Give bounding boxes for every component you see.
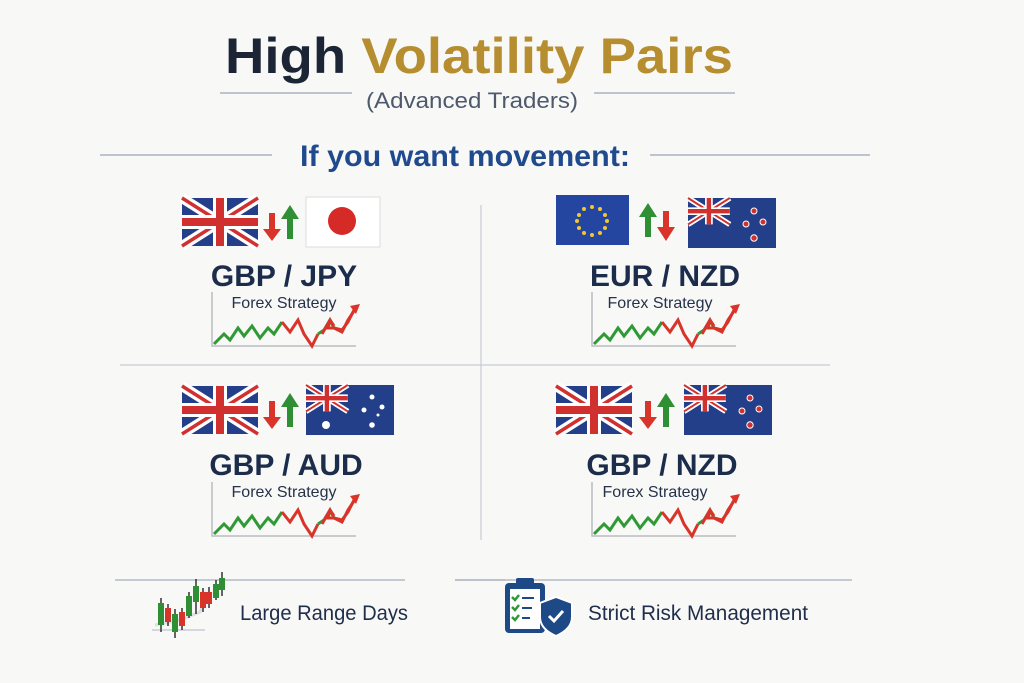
title: High Volatility Pairs	[225, 28, 733, 84]
icon: candlesticks	[152, 572, 225, 638]
panel: EUR/NZD: EUR / NZD	[590, 260, 740, 293]
chart	[212, 292, 360, 346]
icon: flags GBP JPY	[182, 197, 380, 247]
panel: GBP/NZD	[556, 385, 772, 536]
panel: GBP/JPY: GBP / JPY	[211, 260, 357, 293]
chart	[592, 292, 740, 346]
subtitle: (Advanced Traders)	[366, 88, 578, 113]
icon: clipboard with shield	[505, 578, 572, 636]
panel: GBP/AUD: Forex Strategy	[232, 484, 336, 501]
icon: flags GBP NZD	[556, 385, 772, 435]
chart	[212, 482, 360, 536]
panel: EUR/NZD	[556, 195, 776, 346]
panel: GBP/JPY	[182, 197, 380, 346]
panel: EUR/NZD: Forex Strategy	[608, 295, 712, 312]
panel: GBP/NZD: Forex Strategy	[603, 484, 707, 501]
chart	[592, 482, 740, 536]
panel: GBP/NZD: GBP / NZD	[586, 449, 738, 482]
icon: flags GBP AUD	[182, 385, 394, 435]
section heading: If you want movement:	[300, 140, 630, 173]
icon: flags EUR NZD	[556, 195, 776, 248]
panel: GBP/JPY: Forex Strategy	[232, 295, 336, 312]
text: large range days: Large Range Days	[240, 602, 408, 625]
text: strict risk management: Strict Risk Management	[588, 602, 808, 625]
panel: GBP/AUD	[182, 385, 394, 536]
panel: GBP/AUD: GBP / AUD	[209, 449, 363, 482]
